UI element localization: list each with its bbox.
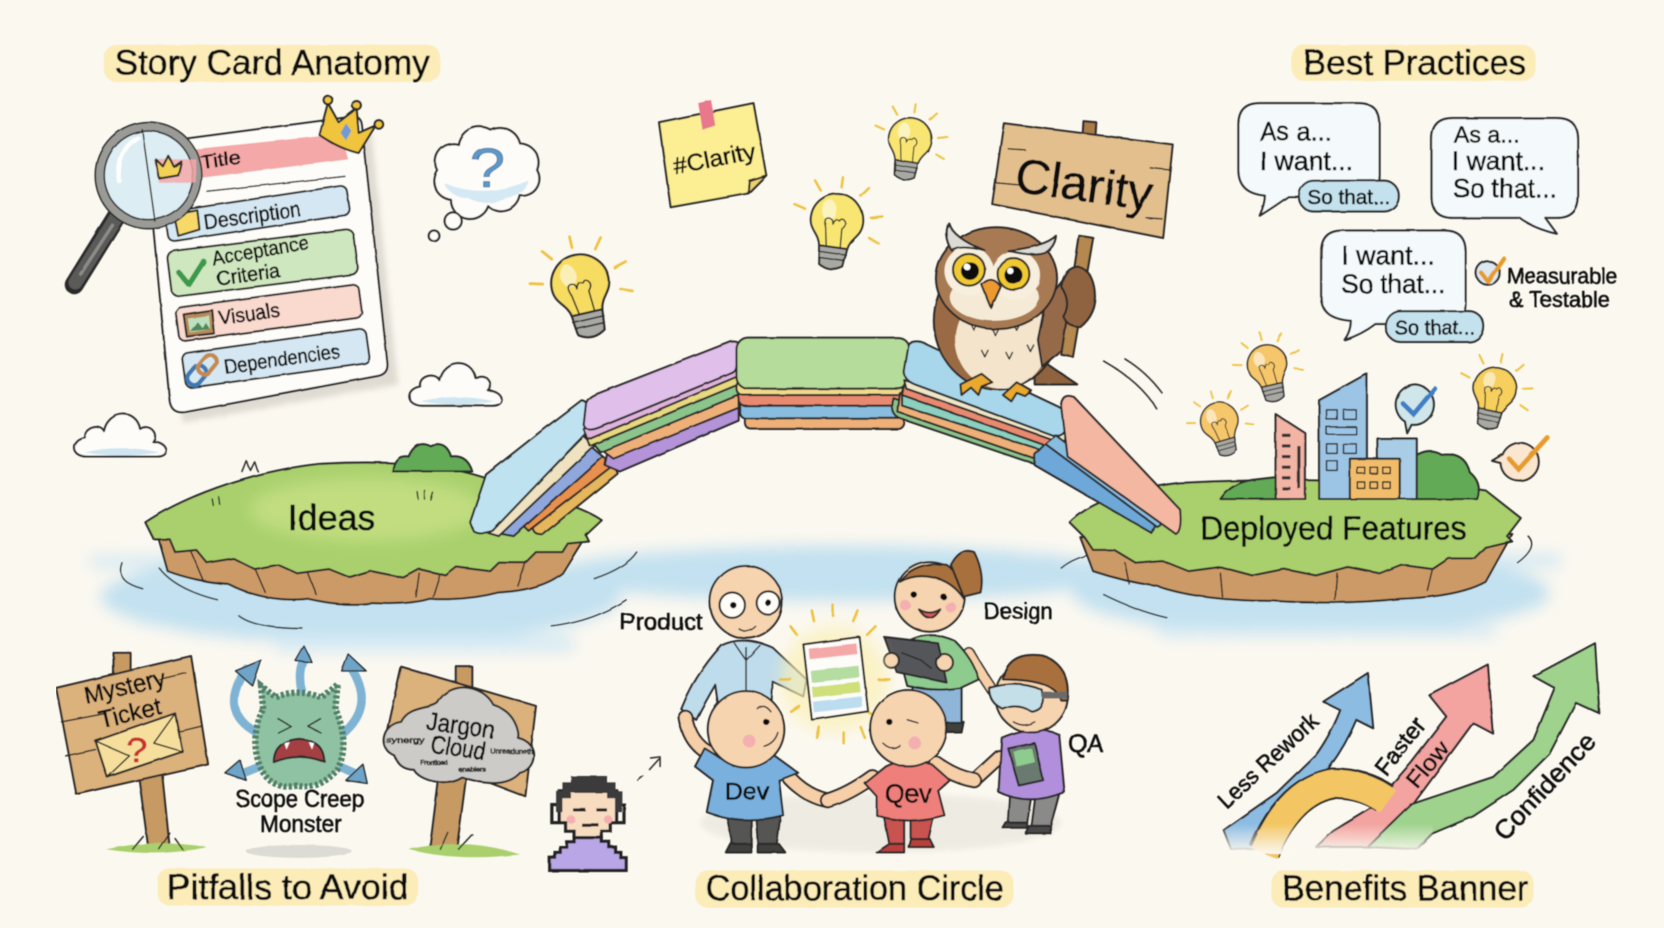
row: Description: [164, 185, 350, 242]
person: Product: [620, 566, 807, 743]
pill: So that: [1299, 181, 1399, 211]
best practice bubble 3: So that...: [1341, 269, 1445, 299]
chat check: orange: [1492, 437, 1547, 481]
bush: [393, 444, 472, 471]
best practice bubble 2: As a...: [1454, 121, 1520, 147]
sign: Clarity: [992, 121, 1173, 238]
brows: [947, 223, 985, 251]
person: Qev: Qev: [885, 781, 932, 809]
scope creep monster: Scope Creep: [236, 786, 364, 813]
icon: envelope: ?: [126, 732, 148, 770]
card stack 1: [470, 400, 618, 536]
shared story card with glow: [780, 605, 889, 743]
card stack 5: [1035, 396, 1181, 534]
scope creep monster: [225, 645, 367, 858]
arrow: Faster Flow: [1316, 665, 1493, 847]
best practice bubble 2: [1432, 118, 1578, 234]
post: [1061, 236, 1093, 357]
jargon cloud: Frontload: [420, 759, 448, 766]
cloud: middle: [409, 363, 502, 406]
card stack 2: [584, 342, 742, 471]
best practice bubble 2: I want...: [1452, 146, 1545, 176]
shadow: [700, 793, 1061, 852]
sticky note: #Clarity: #Clarity: [671, 138, 757, 179]
jargon cloud: Unreaduneth: [490, 747, 533, 756]
best practice bubble 2: So that...: [1453, 174, 1557, 204]
feet: [960, 374, 992, 395]
measurable and testable: Measurable: [1507, 264, 1617, 289]
building: orange: [1350, 459, 1400, 499]
tablet: [884, 637, 947, 683]
hand: [1061, 267, 1095, 327]
pixel character: [550, 757, 660, 870]
arrow: Less Rework: [1212, 673, 1373, 849]
row: Acceptance Criteria: Acceptance: [210, 232, 310, 270]
bulb: deployed 2: [1180, 383, 1260, 464]
scope creep monster: Monster: [260, 811, 342, 838]
icon: picture: [184, 310, 214, 337]
bulb: deployed 1: [1227, 325, 1308, 409]
head: [936, 227, 1057, 329]
row: Visuals: Visuals: [217, 300, 281, 330]
building: back: [1377, 439, 1417, 499]
card: story card anatomy: [146, 117, 398, 423]
jargon cloud: Cloud: [429, 731, 488, 766]
person: Design: [884, 551, 1053, 732]
beak: [982, 280, 1001, 308]
sticky note: #Clarity: [659, 100, 766, 207]
title: Collaboration Circle: Collaboration Circle: [706, 869, 1004, 908]
deployed features city: [1180, 325, 1547, 499]
icon: check: [178, 261, 204, 285]
tail: [1035, 356, 1077, 384]
person: QA: QA: [1069, 731, 1104, 759]
pill: So that: [1386, 311, 1484, 342]
person: Qev: [828, 690, 974, 852]
light bulb: left: [522, 226, 640, 348]
owl holding clarity sign: [934, 121, 1173, 401]
best practice bubble 1: As a...: [1260, 116, 1332, 146]
jargon cloud: synergy: [386, 735, 425, 745]
bridge of story cards: [470, 338, 1181, 536]
arrow: yellow arc: [1264, 783, 1388, 853]
sign: Mystery Ticket: Mystery: [81, 665, 169, 710]
title: Best Practices: Best Practices: [1303, 44, 1526, 83]
title: Story Card Anatomy: Story Card Anatomy: [115, 44, 430, 83]
island: Deployed Features: [1070, 451, 1521, 603]
arrow: Faster Flow: Flow: [1401, 736, 1455, 793]
arrow: Confidence: Confidence: [1489, 727, 1602, 846]
light bulb: middle: [786, 171, 887, 275]
jargon cloud: Jargon: [425, 708, 497, 745]
benefits arrows: [1210, 643, 1602, 853]
building: pink: [1276, 414, 1305, 499]
pill: So that: So that...: [1307, 187, 1390, 209]
arrow: Faster Flow: Faster: [1369, 712, 1431, 780]
title: Pitfalls to Avoid: Pitfalls to Avoid: [167, 868, 409, 907]
jargon cloud: enablers: [458, 767, 486, 774]
collaboration circle: [620, 551, 1104, 852]
arrow: dashed: [638, 757, 660, 780]
label: Design: [984, 598, 1053, 624]
fade: arrow tails: [1210, 824, 1433, 853]
island: Ideas: [145, 444, 602, 604]
chat check: blue: [1396, 384, 1435, 433]
pill: So that: So that...: [1394, 318, 1475, 340]
wing: [1038, 278, 1076, 366]
person: Dev: [686, 691, 828, 852]
icon: note: [174, 210, 200, 236]
row: Acceptance Criteria: Criteria: [215, 260, 282, 291]
icon: crown: [319, 96, 383, 153]
building: blue: [1319, 374, 1367, 499]
sign: Mystery Ticket: Ticket: [96, 693, 164, 734]
body: [934, 252, 1061, 390]
person: Dev: Dev: [725, 778, 770, 805]
person: Product: Product: [620, 609, 703, 635]
person: QA: [974, 655, 1104, 833]
row: Visuals: [175, 284, 363, 342]
icon: chain link: [185, 352, 219, 388]
row: Dependencies: Dependencies: [223, 341, 341, 379]
light bulb: top: [868, 99, 952, 185]
best practice bubble 3: I want...: [1341, 240, 1435, 270]
icon: magnifying glass: [74, 127, 197, 285]
sign: Clarity: Clarity: [1012, 149, 1157, 221]
cloud: left: [74, 414, 166, 457]
jargon cloud: [384, 687, 534, 783]
water: [90, 536, 1560, 652]
row: Description: Description: [202, 198, 302, 234]
thought bubble: [429, 127, 539, 241]
body: [255, 684, 343, 787]
row: Title: Title: [199, 148, 242, 174]
measurable and testable: & Testable: [1509, 287, 1610, 312]
row: Dependencies: [181, 328, 370, 388]
eyes: [953, 254, 985, 286]
title: Benefits Banner: Benefits Banner: [1282, 869, 1528, 908]
sign: Mystery Ticket: [56, 653, 208, 853]
best practice bubble 1: I want...: [1260, 146, 1353, 176]
arrow: Confidence: [1367, 643, 1602, 849]
icon: envelope: [96, 713, 183, 777]
arrows: [234, 656, 362, 775]
label: Deployed Features: Deployed Features: [1200, 509, 1467, 546]
card stack 4: [892, 341, 1067, 464]
label: Ideas: Ideas: [288, 497, 376, 538]
bulb: deployed 3: [1451, 346, 1538, 436]
best practice bubble 1: [1238, 103, 1399, 216]
sign: Jargon Cloud: [384, 667, 536, 857]
arrow: Less Rework: Less Rework: [1212, 708, 1324, 814]
row: Title: [156, 134, 348, 183]
row: Acceptance Criteria: [167, 229, 359, 297]
best practice bubble 3: [1321, 231, 1484, 342]
card stack 3: [736, 338, 909, 429]
measurable and testable: [1476, 258, 1617, 312]
icon: mini crown: [156, 156, 181, 179]
thought bubble: ?: [470, 137, 505, 199]
